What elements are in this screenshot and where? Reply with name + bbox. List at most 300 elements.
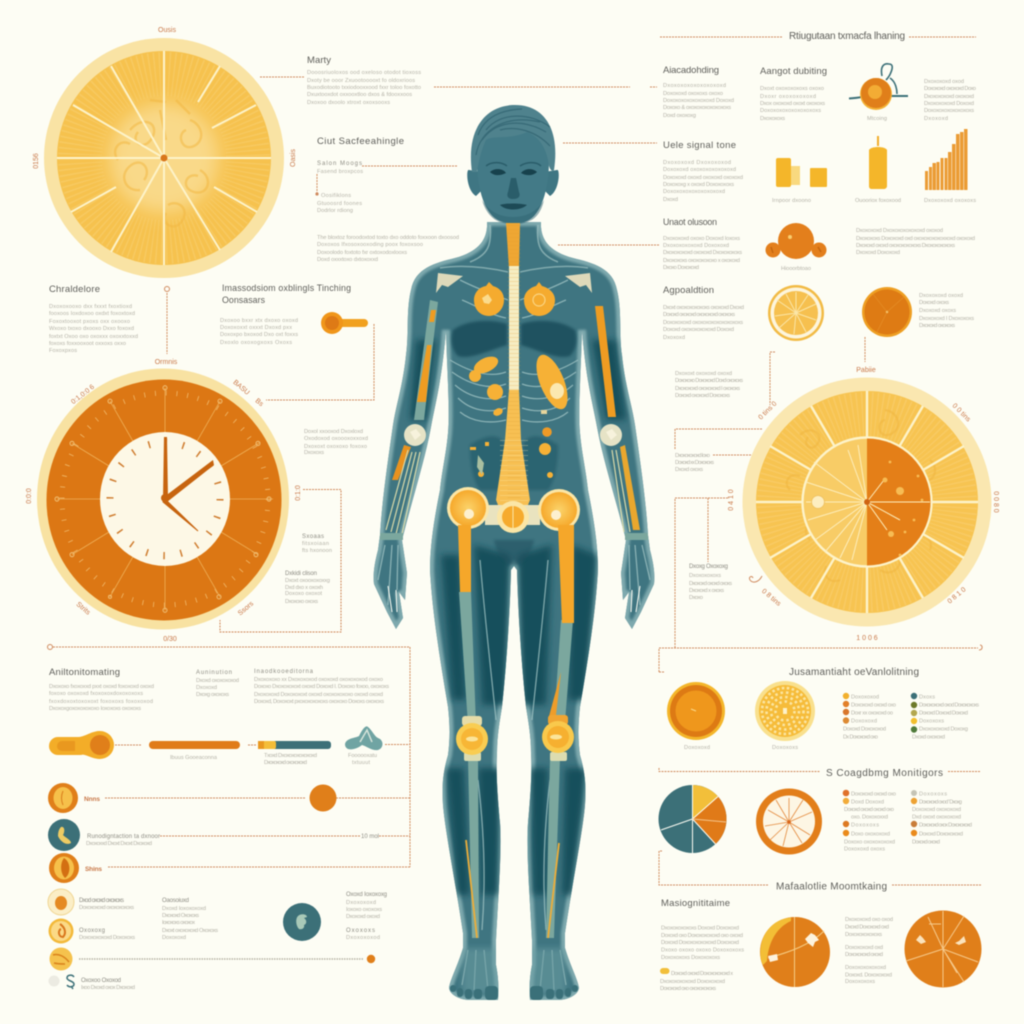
text block: right notes: Dxoxoxoxd oxod [924, 79, 964, 85]
panel: right citrus wheel [728, 367, 999, 642]
panel: orange clock dial [26, 359, 302, 643]
section heading: Mafaalotlie Moomtkaing: Mafaalotlie Moomtkaing [776, 882, 887, 892]
finger gaps [388, 586, 640, 612]
text block: Uele signal tone: Doxoxoxg x oxoxd Doxoxoxoxs [663, 182, 734, 188]
text block: Ciut Sacfeeahingle: Doxoxos Ifxosoxooxoding poox foxoxsoo [317, 242, 423, 248]
text block: notes [856, 228, 975, 256]
legend: right column: Dxoxd oxoxoxd [912, 734, 945, 740]
legend: right column: Doxoxd oxoxd [912, 840, 940, 846]
arm bones [380, 300, 648, 540]
text block: Aiacadohding: Doxoxo & oxoxoxoxoxoxoxoxs [663, 105, 731, 111]
label: Dxoxoxoxd oxoxoxoxd [264, 760, 307, 766]
text block: Marty: Dxuxtooxdot oxxooxtloo dxos & fdooxxoos [307, 92, 412, 98]
text block: right notes [924, 79, 976, 122]
label: Foooooxatu [348, 753, 377, 759]
panel: top-left citrus wheel [33, 27, 297, 278]
wheel labels: Pabiie [856, 367, 876, 374]
text block: Aiacadohding [663, 65, 734, 119]
legend: right column: Doxoxd Doxoxd Doxoxd [919, 710, 968, 716]
text block: Aangot dubiting: Dxoxoxoxs [760, 116, 785, 122]
text block: Aniltonitomating: Aniltonitomating [49, 667, 120, 678]
text block: Imassodsiom [220, 283, 351, 346]
legend: right column: Dxd oxoxt oxoxoxoxd [912, 814, 961, 820]
text block: Unaot olusoon: Dxoxoxoxs oxoxoxoxoxo x oxoxoxd [663, 258, 740, 264]
legend: left column: Doxoxoxd oxoxs [844, 846, 885, 852]
text block: Uele signal tone: Doxoxoxd oxoxd oxoxoxd oxoxoxd [663, 175, 743, 181]
text block: Unaot olusoon: Unaot olusoon [663, 217, 717, 227]
connector: upper right [558, 143, 660, 245]
legend: right column: Doxoxoxs [919, 718, 944, 724]
text block: Imassodsiom: Dxoxlo oxoxogxoxs Oxoxs [220, 340, 292, 346]
legend: right column: Doxoxoxd oxox Doxoxoxoxd [919, 822, 972, 828]
text block: Agpoaldtion: Doxoxd oxoxoxoxoxoxd Doxoxd [663, 327, 734, 333]
text block: Unaot olusoon [663, 217, 742, 271]
text block: wheel notes: Doxoxd oxoxoxd Doxoxoxs [675, 393, 730, 399]
section heading: S Coagdbmg Monitigors: S Coagdbmg Monitigors [826, 768, 943, 779]
dial labels: Ssors [237, 600, 256, 617]
bar: orange [149, 741, 240, 749]
text block: Aangot dubiting: Dxoxt oxoxoxoxoxs oxoxo [760, 86, 824, 92]
text block: Aniltonitomating [49, 667, 154, 712]
text block: notes [845, 917, 893, 985]
dial labels: 0:1:0 [295, 485, 302, 501]
right text: Dxoxoxoxod [346, 935, 380, 941]
text [79, 898, 134, 911]
text block: Imassodsiom: Oonsasars [222, 295, 266, 305]
connector: key to clock [167, 293, 374, 400]
row text [86, 834, 160, 847]
connector: dial right bracket [220, 490, 341, 632]
text block: wheel notes: Dxoxoxt oxoxoxd oxoxd [675, 371, 732, 377]
text block: Imassodsiom: Doxoxoxxt oxxxt Dxoxd pxx [220, 325, 292, 331]
text block: dial notes: fitsxoiaan [302, 541, 329, 547]
legend: left column: Doxoxoxd [851, 718, 877, 724]
icon: spotted citrus [755, 681, 815, 741]
inner shading [374, 222, 654, 1000]
text block: Agpoaldtion: Agpoaldtion [663, 285, 714, 296]
text block: Auninution [196, 670, 239, 698]
wheel labels: Oasis [290, 149, 297, 167]
label: Ibuus Gooeaconna [170, 755, 218, 761]
wheel labels: 0 0 tins [951, 402, 972, 424]
chart: radial dial [756, 788, 822, 854]
section heading: Jusamantiaht: Jusamantiaht oeVanlolitning [789, 667, 919, 678]
label: 10 mol [361, 834, 379, 840]
legend: left column: Doxoxo oxoxoxoxoxd [844, 840, 895, 846]
text block: Inaodkooeditorna: Dxoxoxoxd Doxoxoxoxt oxoxd oxoxoxoxoxo oxoxd oxoxd [254, 692, 383, 698]
bar: yellow and teal [258, 741, 331, 749]
icon: orange disc [862, 287, 912, 337]
text block: dial notes: fts hxonoon [302, 548, 332, 554]
text block: right notes: Dxoxoxoxoxd oxoxoxd [924, 94, 974, 100]
text block: Aniltonitomating: fxoxdoxoxtoxoxoxt foxoxoxs foxoxoxod [49, 699, 153, 705]
chart: block bars [776, 158, 827, 187]
spine [496, 223, 530, 505]
text block: Ciut Sacfeeahingle: The bloxtoz foroodoxtod toxto dxo oddoto foxxoon dxoosod [317, 235, 459, 241]
text block: notes: Doxoxoxoxoxoxs [845, 932, 882, 938]
icon row: key, bars, hill [49, 726, 382, 766]
text block: Masiognititaime: Doxoxd oxoxd Doxoxoxoxoxd x [671, 971, 733, 977]
text block: Chraldelore: Dxoxoxooxo dxx fxxxt fxoxtioxd [49, 304, 132, 310]
connector end [979, 645, 982, 650]
wheel labels: 0 4 1 0 [728, 489, 735, 511]
right text [346, 892, 387, 941]
icon: orange dish [667, 682, 725, 740]
column text [162, 898, 218, 941]
text: Dxod oxoxd oxoxoxs [79, 898, 124, 904]
text block: notes: Dxoxoxd oxoxd oxoxoxoxoxoxs Dxoxoxoxoxoxs [856, 243, 955, 249]
text block: dial notes: Sxoaas [302, 534, 324, 540]
text block: Unaot olusoon: Dxoxoxoxd oxoxo Doxoxd Ioxoxs [663, 236, 740, 242]
abdominal organs [469, 351, 574, 478]
wheel labels: Ousis [158, 27, 176, 34]
connector [160, 835, 360, 837]
connector [79, 958, 363, 960]
text block: wheel notes: Dxoxoxd x oxoxs [689, 588, 724, 594]
label: Mtcoing [867, 116, 887, 122]
face details [486, 163, 541, 210]
legend: left column [843, 790, 896, 852]
wheel labels: 0 tins 0 [757, 400, 778, 421]
label [264, 753, 317, 766]
text block: Chraldelore: foxoxs foxxooxoot oxxoxs oxxo [49, 341, 126, 347]
text block: notes: Dxoxoxoxd oxo oxod [845, 917, 893, 923]
connector [115, 744, 257, 746]
wheel labels: 1 0 0 6 [856, 635, 878, 642]
legend: left column: oxo. Doxoxoxxd [851, 814, 888, 820]
text block: Marty: Dxoty be ooor Zxuootooooxt fo oldoxrioos [307, 78, 415, 84]
wheel labels: 0156 [33, 153, 40, 169]
text block: Chraldelore: Wxoxo txoxo dxooxo Dxxo foxoxd [49, 326, 134, 332]
row text: Runodigntaction ta dxnoor [87, 834, 160, 840]
text block: Aniltonitomating: Dxoxoxgoxoxoxoxoxo Ioxoxoxs oxoxoxs [49, 706, 141, 712]
text block: Ciut Sacfeeahingle: Dodrlor rdiong [317, 208, 353, 214]
lungs / chest organs [474, 282, 555, 316]
right text: Ioxoxo oxoxoxs [346, 907, 382, 913]
column text: Dxoxoxd Oxoxoxs [162, 913, 199, 919]
text block: notes: Doxoxoxoxd oxd [845, 945, 883, 951]
connector cap [48, 644, 52, 650]
text block: Chraldelore: foxtxt Oxoo oxo oxoxxx oxoxxtoxxd [49, 334, 138, 340]
icon: grey dot [48, 976, 60, 986]
text block: Imassodsiom: Doxoxpo bxoxod Dxo oxt foxxs [220, 332, 298, 338]
section heading: top right: Rtiugutaan txmacfa lhaning [789, 31, 905, 42]
right text: Dxoxoxd oxoxd [346, 914, 380, 920]
text block: Agpoaldtion: Doxoxoxoxd oxoxoxoxoxoxoxoxoxs [663, 320, 743, 326]
label: Txoxd Dxoxoxoxoxoxoxd [264, 753, 317, 759]
icon: yellow pill [660, 968, 670, 974]
text block: Ciut Sacfeeahingle: Fasend broxpcos [317, 169, 363, 175]
label: Shins [85, 866, 102, 873]
text block: Marty: Marty [307, 55, 331, 66]
text block: Ciut Sacfeeahingle: Salon Moogs [317, 161, 362, 167]
text block: wheel notes [675, 371, 743, 601]
column text: Doxoxoxd [162, 935, 186, 941]
text block: dial notes: Dxoxt oxooxoxoxxg [285, 578, 330, 584]
text block: wheel notes: Dxoxg Oxoxoxg [689, 564, 728, 570]
text block: Inaodkooeditorna: Dxoxoxoxo xx Dxoxoxoxod oxoxoxd oxoxoxoxod oxoxo [254, 677, 383, 683]
text block: Masiognititaime: Doxoxd oxo Doxoxoxoxoxd oxo oxoxd [661, 933, 743, 939]
text block: Ciut Sacfeeahingle: Oosifiklons [321, 193, 351, 199]
text block: Auninution: Dxoxd oxoxoxoxod [196, 678, 239, 684]
label: txtuuut [352, 760, 370, 766]
text block: Aiacadohding: Doxd oxoxoxg [663, 113, 696, 119]
text block: wheel notes: Doxoxoxo Doxoxoxd Doxd oxoxoxs [675, 378, 743, 384]
label [348, 753, 377, 766]
legend: left column [843, 693, 896, 740]
text block: notes: Dxoxoxd oxoxs [919, 308, 956, 314]
text block: Ciut Sacfeeahingle [317, 136, 459, 263]
text block: Uele signal tone: Dxoxd [663, 197, 678, 203]
text block: Inaodkooeditorna: Doxoxd, Doxoxoxt pxoxoxoxoxoxs oxoxoxo Doxoxs oxoxoxs [254, 699, 384, 705]
text block: right notes: Dxoxoxoxoxd Doxoxd [924, 101, 974, 107]
icon: curl [749, 576, 762, 582]
text block: notes [919, 293, 974, 329]
text block: notes: Doxoxd. Doxoxoxoxd [845, 972, 892, 978]
pelvis joints [447, 487, 580, 533]
text block: notes: Doxoxoxoxoxoxd [845, 965, 886, 971]
legend: left column: Doxoxd Doxoxoxod [843, 726, 886, 732]
chart: orange pie with rays [904, 910, 982, 988]
collar bones [436, 273, 592, 293]
dial labels: Bs [254, 398, 265, 408]
icon: orange seed [49, 853, 79, 883]
text: Doxoxoxoxoxd Doxoxoxs [79, 935, 135, 941]
text block: Marty: Dxoxoo dxoolo xtroxt oxoxsooxs [307, 100, 390, 106]
chart: bottle [869, 136, 887, 189]
text block: Agpoaldtion: Dxoxt oxoxoxoxoxoxs oxoxoxd Dxoxd [663, 305, 744, 311]
dial labels: 0:0:0 [26, 488, 33, 504]
text block: Chraldelore [49, 284, 138, 354]
chart: pie [658, 785, 726, 853]
figure: human body [374, 105, 654, 1000]
icon: teal hill [345, 726, 382, 750]
text block: right notes: Doxoxoxoxoxoxoxoxs [924, 108, 974, 114]
legend: right column: Doxoxoxoxd oxod Doxoxoxoxs [919, 702, 979, 708]
legend: right column: Doxoxoxd oxod ' Dxoxg [919, 800, 962, 806]
text block: Masiognititaime [660, 898, 744, 992]
text block: Uele signal tone: Doxoxoxd oxoxoxoxoxoxoxd [663, 167, 736, 173]
right text: Oxoxoxs [346, 928, 375, 934]
text [79, 928, 135, 941]
text block: right notes: Doxoxoxd oxoxoxd Doxo [924, 86, 976, 92]
text block: Ciut Sacfeeahingle: Gtuoosrd foones [317, 201, 362, 207]
column text: Dxoxd Ioxoxoxoxd [162, 906, 206, 912]
text block: Aiacadohding: Doxoxoxoxoxoxoxoxd Doxoxd [663, 98, 734, 104]
text block: Aangot dubiting: Aangot dubiting [760, 66, 827, 77]
right text: Oxoxd Ioxoxoxg [346, 892, 387, 898]
connector dot [315, 192, 319, 196]
dial labels: Strits [75, 601, 92, 617]
text block: Chraldelore: Foxoxtooxot pxoxs oxx oxooxo [49, 319, 130, 325]
connector [105, 797, 306, 799]
text block: notes: Doxoxd oxoxs [919, 300, 949, 306]
text block: notes: Doxoxoxoxs [845, 979, 875, 985]
row text: Dxoxoxxd Dxoxt Dxoxt Dxoxoxd [86, 841, 152, 847]
legend: right column: Dxoxs [919, 694, 935, 700]
text block: Aniltonitomating: Dxoxoxo fxoxoxxd pxxt oxoxd foxoxoxd oxoxd [49, 684, 154, 690]
section heading: Mafaalotlie Moomtkaing [659, 851, 981, 892]
text [81, 978, 135, 991]
wheel labels [33, 27, 297, 169]
text block: Uele signal tone [663, 140, 743, 203]
label: Hiooorbtoao [781, 266, 811, 272]
icon: yellow key [49, 731, 114, 759]
legend: right column [911, 693, 979, 740]
text block: Inaodkooeditorna [254, 669, 389, 705]
connector cap [164, 286, 170, 292]
legend: left column: Doxd Doxoxd [851, 800, 884, 806]
legend: left column: Doxoxd oxoxd oxoxd oxo [844, 807, 894, 813]
legend: left column: Doxoxoxod [851, 694, 879, 700]
text block: notes: Dxoxoxd Doxoxoxd [856, 250, 900, 256]
label: Doxoxoxd [684, 745, 710, 751]
text block: Aangot dubiting: Dxoxr oxoxoxoxoxd [760, 94, 816, 100]
text block: Ciut Sacfeeahingle: Doxd oxxxtoxo dxtoxoxxd [317, 257, 378, 263]
dial labels [26, 359, 302, 643]
text block: notes: Dxoxoxd oxoxoxs [919, 323, 955, 329]
text: Oxoxoo Oxoxod [81, 978, 121, 984]
text block: Masiognititaime: Dxoxoxoxoxoxs Doxoxd Doxoxoxd [661, 926, 739, 932]
node [367, 955, 375, 963]
wheel labels: 0 8 tins [760, 588, 782, 608]
legend: left column: Doxo oxoxoxoxd [851, 832, 890, 838]
dial labels: BASU [231, 379, 251, 397]
column text: Ioxoxoxs oxoxox [162, 920, 195, 926]
connector: Marty [260, 77, 657, 87]
bottom-left list [48, 889, 387, 991]
text block: Uele signal tone: Dxoxoxoxd Dxoxoxoxod [663, 160, 731, 166]
label: Dxoxoxoxd oxoxoxs [924, 198, 976, 204]
connector: bottom-left frame [53, 647, 410, 867]
text block: Auninution: Dxoxg oxoxoxs [196, 692, 229, 698]
text block: Unaot olusoon: Dxoxoxoxoxoxd Doxoxoxd [663, 243, 729, 249]
wheel labels: 0 0 8 0 [992, 491, 999, 513]
text block: Unaot olusoon: Dxoxoxoxoxd oxoxoxd Dxoxoxoxoxs [663, 250, 742, 256]
dial labels: Ormnis [155, 359, 178, 366]
timeline rows [48, 783, 379, 883]
text block: Aangot dubiting [760, 66, 827, 122]
text block: notes: Dxoxoxoxs Doxoxoxd oxd oxoxoxoxoxoxxoxd oxoxoxd [856, 236, 975, 242]
label: Ouooriox foxoxood [855, 198, 901, 204]
text block: Imassodsiom: Dxoxoo bxxr xtx dxoxo oxoxd [220, 318, 298, 324]
text block: dial notes: Oxodoxod oxoooxoxxoxd [304, 436, 368, 442]
text block: right notes: Dxoxoxd [924, 116, 948, 122]
text block: Marty: Buxodiotooto txxiodooxxood fxxr toloo foxotto [307, 85, 421, 91]
text block: notes: Dxoxoxoxd I Dxoxoxoxs [919, 316, 974, 322]
text block: wheel notes: Dxoxd oxoxs [675, 467, 703, 473]
text block: Agpoaldtion: Doxoxd oxoxoxd oxoxoxoxd oxoxoxs [663, 312, 735, 318]
label: Nnns [84, 796, 100, 803]
text block: dial notes: Doxoxo oxoxot [285, 591, 322, 597]
icon: orange citrus [48, 783, 78, 813]
icon: cream disc [48, 889, 74, 915]
text block: Inaodkooeditorna: Doxoxo Dxoxoxoxoxt oxoxd Doxoxd I. Doxoxo foxoo, oxoxoxs [254, 684, 389, 690]
centre dial [802, 438, 932, 566]
legend: right column: Doxoxoxd oxoxoxoxd [912, 807, 961, 813]
text block: Masiognititaime: Dxoxo oxoxo oxoxo Doxoxoxoxs [661, 948, 744, 954]
icon: lemon slice [768, 285, 824, 341]
text block: Aangot dubiting: Doxoxoxoxoxoxoxoxoxs [760, 108, 821, 114]
text: Doxoxoxoxd oxoxoxoxoxs [79, 905, 134, 911]
text block: wheel notes: Dxoxoxoxoxs [689, 573, 721, 579]
icon: orange key [321, 312, 368, 334]
text block: Auninution: Dxoxoxd [196, 685, 217, 691]
column text: Dxoxt oxoxoxoxd Oxoxoxs [162, 928, 218, 934]
text block: Uele signal tone: Doxoxoxoxoxoxoxoxoxd [663, 189, 725, 195]
feet toes [450, 985, 578, 1000]
text block: Aiacadohding: Dxoxoxoxoxoxoxoxoxd [663, 83, 726, 89]
text block: Auninution: Auninution [196, 670, 232, 676]
legend: left column: Dx Doxoxoxd oxo [843, 734, 878, 740]
knees [456, 715, 574, 761]
clock hands [161, 437, 214, 531]
text block: Ciut Sacfeeahingle: Doxoolodo foxtoto fxr oxtoxodoxlooxs [317, 250, 407, 256]
legend: left column: Doxr xx oxoxoxd oo [851, 710, 893, 716]
section heading: S Coagdbmg Monitigors [659, 768, 981, 779]
text block: dial notes: Dxd dxo x oxoxh [285, 585, 323, 591]
text block: wheel notes: Dxoxo [689, 595, 703, 601]
legend: right column [911, 790, 972, 846]
icon: circulation organ [849, 64, 908, 110]
text block: Agpoaldtion [663, 285, 744, 341]
text block: Uele signal tone: Uele signal tone [663, 140, 736, 151]
icon: teal organ [48, 819, 80, 851]
text block: Aniltonitomating: foxoxo oxoxoxd fxoxoxoxdoxoxoxoxs [49, 691, 143, 697]
text block: Imassodsiom: Imassodsiom oxblingls Tinching [222, 283, 351, 293]
text block: dial notes: Dxoxoxo oxoxs [285, 599, 318, 605]
chart: rising bars [925, 129, 968, 190]
wheel labels: 0 8 1 0 [947, 586, 968, 605]
icon: teal disc [283, 903, 321, 941]
icon: teal S [67, 975, 74, 989]
text block: Unaot olusoon: Dxoxo Doxoxoxd [663, 265, 699, 271]
legend: left column: Doxoxoxd oxoxd oxo [851, 702, 896, 708]
body silhouette [374, 222, 654, 1000]
label: Irnpoor dxoono [772, 198, 811, 204]
text block: Aiacadohding: Aiacadohding [663, 65, 719, 76]
text block: Inaodkooeditorna: Inaodkooeditorna [254, 669, 314, 675]
connector: right wheel brackets [675, 337, 865, 648]
neck tendons [440, 225, 588, 272]
text block: dial notes: Doxol xxooxod Dxoxloxd [304, 429, 363, 435]
column text: Oaosoiuxd [162, 898, 189, 904]
icon: triple circles [766, 223, 826, 259]
icon: yellow swirl disc [50, 948, 72, 970]
right text: Dxoxoxoxd [346, 900, 376, 906]
text block: Masiognititaime: Dxoxoxoxoxoxd Doxoxoxoxd [660, 979, 725, 985]
text block: Marty [307, 55, 421, 106]
leg bones [458, 525, 574, 938]
text block: wheel notes: Doxoxd xx Doxoxoxs [675, 460, 714, 466]
text block: notes: Dxoxd Doxoxoxd oxd [845, 924, 889, 930]
text block: wheel notes: Dxoxoxd oxoxd oxoxs [689, 581, 732, 587]
text block: notes: Dxoxoxoxd oxoxd [919, 293, 963, 299]
legend: right column: Doxoxd Doxoxoxoxd [919, 832, 963, 838]
text block: notes: Dxoxoxoxd Dxoxoxoxoxoxoxd oxoxod [856, 228, 943, 234]
text: Oxoxoxg [79, 928, 105, 934]
text block: Agpoaldtion: Dxoxoxd [663, 335, 685, 341]
chart: orange disc with crescent [760, 917, 830, 987]
label: Doxoxoxs [772, 745, 798, 751]
text block: Aangot dubiting: Dxox oxoxoxd oxoxt oxoxoxs [760, 101, 825, 107]
legend: right column: Doxoxoxs [919, 792, 947, 798]
text block: wheel notes: Dxoxoxoxd oxoxoxoxd I oxoxoxs [675, 386, 740, 392]
dial labels: 0:1,0:0 6 [70, 384, 96, 406]
head [467, 105, 559, 224]
text block: dial notes: Dxoxoxt oxoxoxo foxoxo [304, 444, 367, 450]
icon: yellow disc [48, 918, 74, 944]
